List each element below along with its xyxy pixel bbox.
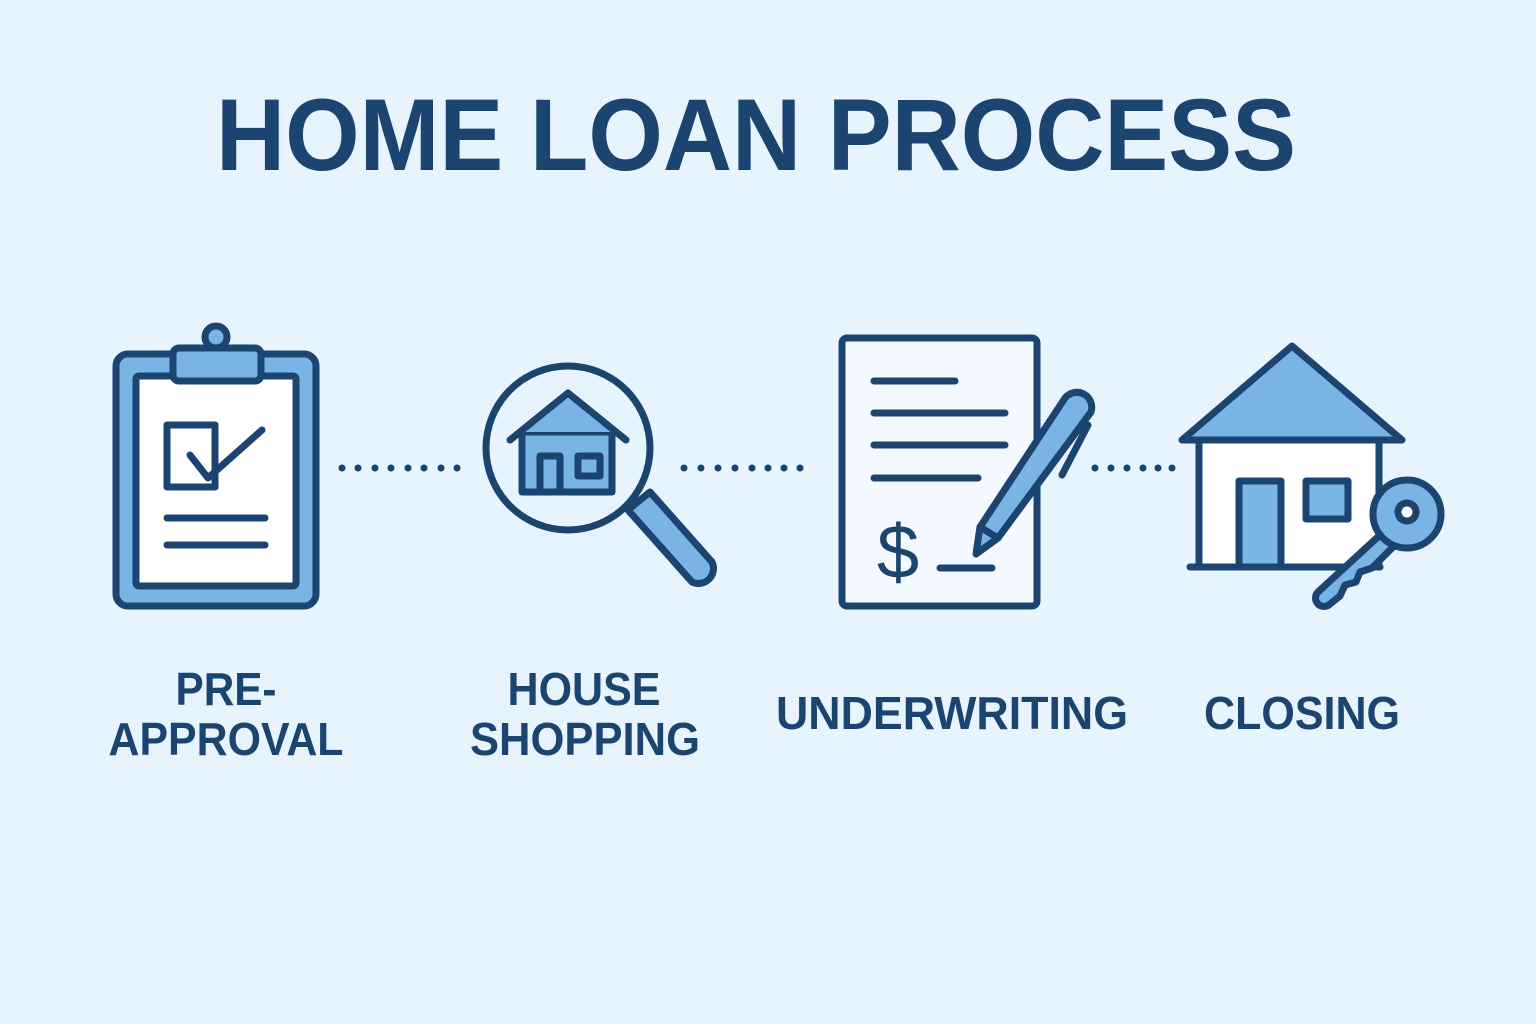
text: dollar sign: $	[877, 510, 919, 595]
label: pre-approval: PRE-	[176, 663, 276, 715]
arrow: dots 3	[1092, 464, 1176, 472]
icon: clipboard	[116, 326, 316, 606]
label: house shopping: SHOPPING	[470, 713, 700, 765]
label: closing: CLOSING	[1204, 687, 1400, 739]
label: underwriting: UNDERWRITING	[776, 687, 1128, 739]
arrow: dots 1	[338, 464, 460, 472]
icon: document with pen	[842, 338, 1092, 606]
label: house shopping	[470, 663, 700, 765]
label: house shopping: HOUSE	[508, 663, 660, 715]
title: HOME LOAN PROCESS	[216, 78, 1296, 192]
label: pre-approval: APPROVAL	[108, 713, 344, 765]
icon: house with key	[1182, 346, 1441, 606]
label: pre-approval	[108, 663, 344, 765]
icon: magnifier with house	[486, 366, 713, 583]
arrow: dots 2	[680, 464, 804, 472]
